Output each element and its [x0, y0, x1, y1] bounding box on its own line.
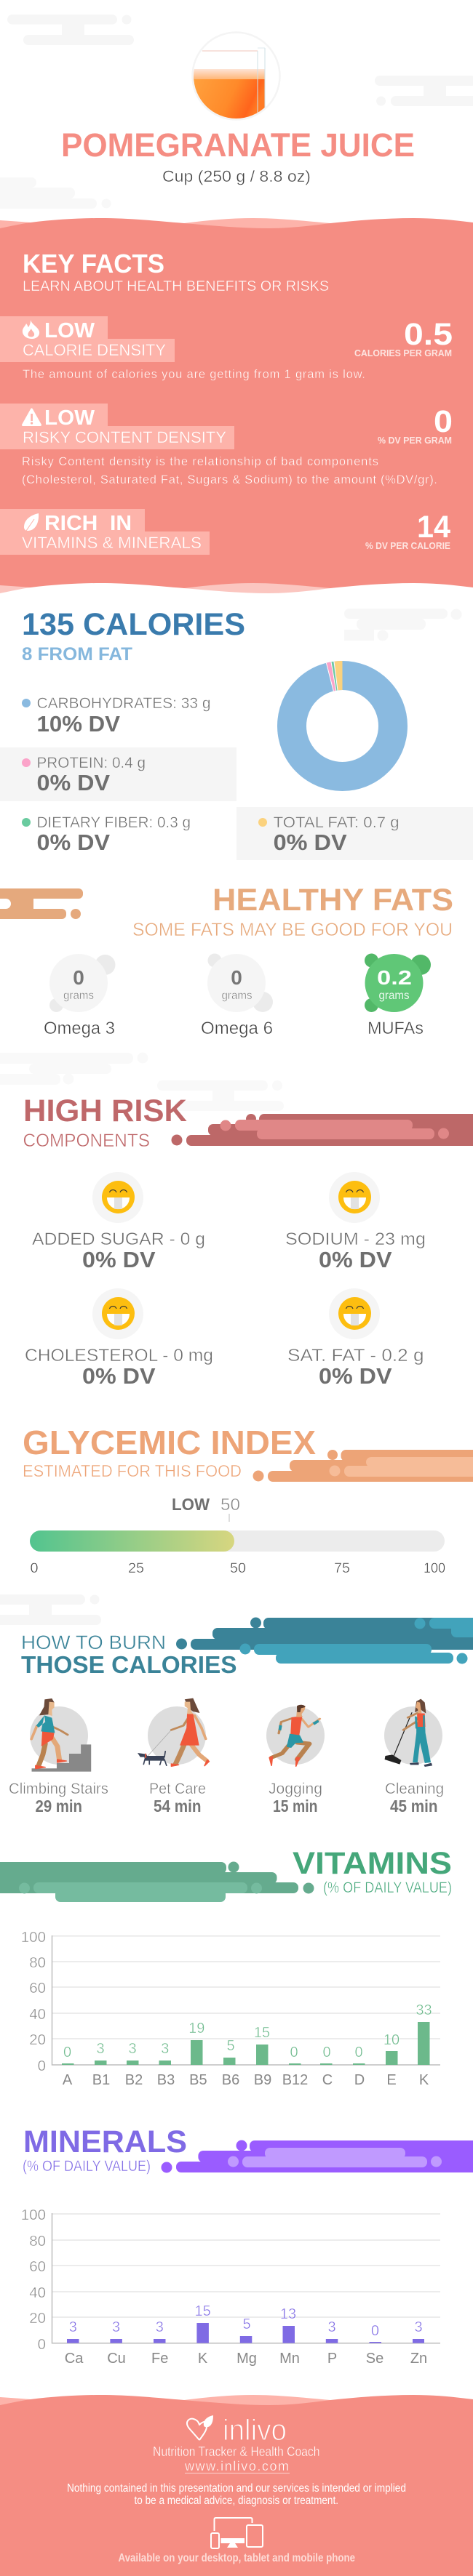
icon: leaf	[24, 513, 39, 531]
gauge scale	[31, 1561, 445, 1576]
bar chart: vitamins: 20	[29, 2031, 46, 2048]
bar chart: vitamins: 100	[21, 1929, 46, 1946]
heading: glycemic index: GLYCEMIC INDEX	[23, 1424, 316, 1461]
disclaimer	[67, 2482, 406, 2507]
gauge scale: 100	[424, 1561, 445, 1576]
legend: dietary fiber	[22, 814, 191, 855]
activity: climbing stairs	[9, 1698, 108, 1815]
fact: risky content density: 0	[434, 404, 453, 439]
heading: minerals: MINERALS	[23, 2124, 187, 2159]
panel: how to burn those calories	[9, 1617, 473, 1815]
bar chart: vitamins: C	[322, 2072, 333, 2088]
chart: macronutrient donut	[292, 661, 393, 777]
stat: omega 6	[201, 954, 273, 1038]
activity: cleaning	[384, 1699, 444, 1815]
activity: jogging: Jogging	[269, 1781, 322, 1797]
gauge scale: 75	[334, 1561, 350, 1576]
subheading: glycemic index: ESTIMATED FOR THIS FOOD	[23, 1461, 242, 1480]
bar chart: minerals: 40	[29, 2284, 46, 2301]
bar chart: vitamins: A	[63, 2072, 73, 2088]
heading: key facts: KEY FACTS	[23, 249, 164, 278]
bar chart: minerals: 20	[29, 2310, 46, 2327]
subheading: key facts: LEARN ABOUT HEALTH BENEFITS OR RISKS	[23, 278, 329, 294]
legend: total fat: TOTAL FAT: 0.7 g	[274, 814, 400, 831]
bar chart: vitamins: 0	[354, 2045, 363, 2061]
activity: jogging	[266, 1705, 325, 1815]
heading: vitamins: VITAMINS	[293, 1846, 452, 1881]
heading: high risk: HIGH RISK	[23, 1094, 187, 1128]
icon: grinning face	[102, 1297, 135, 1330]
legend: dietary fiber: DIETARY FIBER: 0.3 g	[36, 814, 191, 831]
stat: omega 3: grams	[63, 990, 94, 1002]
item: sodium	[285, 1172, 426, 1272]
title: POMEGRANATE JUICE	[61, 127, 415, 164]
bar chart: minerals: 0	[38, 2336, 46, 2353]
activity: climbing stairs: 29 min	[35, 1797, 82, 1815]
subheading: vitamins: (% OF DAILY VALUE)	[323, 1879, 452, 1896]
bar chart: vitamins: 3	[96, 2041, 105, 2057]
fact: calorie density: CALORIES PER GRAM	[354, 348, 452, 358]
bar chart: vitamins: 33	[416, 2002, 432, 2018]
icon: grinning face	[102, 1181, 135, 1213]
bar chart: vitamins: 5	[226, 2038, 235, 2054]
stat: omega 3	[44, 954, 115, 1038]
bar chart: vitamins: B5	[189, 2072, 207, 2088]
icon: warning triangle	[23, 409, 41, 425]
disclaimer: to be a medical advice, diagnosis or treatment.	[134, 2495, 338, 2507]
bar chart: vitamins: B2	[125, 2072, 143, 2088]
bar chart: vitamins: B6	[222, 2072, 239, 2088]
bar chart: vitamins: B3	[157, 2072, 175, 2088]
disclaimer: Nothing contained in this presentation and our services is intended or implied	[67, 2482, 406, 2495]
availability note: Available on your desktop, tablet and mobile phone	[118, 2552, 355, 2564]
item: saturated fat: SAT. FAT - 0.2 g	[287, 1346, 424, 1365]
subheading: minerals: (% OF DAILY VALUE)	[23, 2158, 151, 2175]
bar chart: vitamins: B12	[282, 2072, 308, 2088]
bar chart: vitamins: B9	[254, 2072, 271, 2088]
fact: vitamins and minerals: 14	[417, 510, 450, 545]
legend: total fat: 0% DV	[274, 830, 347, 855]
stat: omega 3: Omega 3	[44, 1019, 115, 1038]
bar chart: minerals: Cu	[107, 2351, 126, 2367]
bar chart: vitamins: 3	[161, 2041, 169, 2057]
bar chart: vitamins: B1	[92, 2072, 110, 2088]
bar chart: vitamins: K	[419, 2072, 429, 2088]
activity: pet care: 54 min	[154, 1797, 201, 1815]
panel: high risk components	[23, 1094, 473, 1389]
stat: MUFAs: 0.2	[377, 966, 412, 989]
legend: dietary fiber: 0% DV	[36, 830, 110, 855]
gauge value label: LOW	[172, 1495, 210, 1514]
gauge value label	[172, 1495, 240, 1514]
bar chart: minerals: 3	[69, 2319, 77, 2335]
icon: woman sweeping	[385, 1699, 432, 1767]
item: cholesterol	[25, 1288, 213, 1389]
bar chart: minerals: 3	[112, 2319, 120, 2335]
activity: cleaning: Cleaning	[385, 1781, 444, 1797]
food photo: glass of juice	[192, 32, 279, 121]
icon: grinning face	[338, 1181, 371, 1213]
bar chart: minerals: Ca	[65, 2351, 84, 2367]
heading: calories: 135 CALORIES	[22, 607, 245, 642]
item: saturated fat	[287, 1288, 424, 1389]
bar chart: vitamins: 0	[38, 2058, 46, 2074]
panel: minerals	[21, 2124, 473, 2367]
stat: omega 3: 0	[73, 966, 84, 989]
stat: omega 6: Omega 6	[201, 1019, 273, 1038]
subheading: components: COMPONENTS	[23, 1131, 150, 1151]
item: saturated fat: 0% DV	[319, 1363, 392, 1389]
bar chart: vitamins: 3	[128, 2041, 137, 2057]
panel: footer	[0, 2395, 473, 2576]
heading line 1: HOW TO BURN	[21, 1632, 166, 1653]
activity: climbing stairs: Climbing Stairs	[9, 1781, 108, 1797]
item: cholesterol: 0% DV	[82, 1363, 156, 1389]
bar chart: minerals: 80	[29, 2233, 46, 2250]
bar chart: minerals: 3	[414, 2319, 423, 2335]
logo: inlivo: inlivo	[223, 2413, 287, 2447]
gauge scale: 0	[31, 1561, 38, 1576]
fact: risky content density: Risky Content density is the relationship of bad components	[22, 455, 378, 468]
stat: omega 6: grams	[221, 990, 252, 1002]
item: added sugar	[32, 1172, 205, 1272]
item: sodium: 0% DV	[319, 1247, 392, 1272]
icon: devices	[211, 2518, 263, 2548]
item: added sugar: ADDED SUGAR - 0 g	[32, 1229, 205, 1249]
bar chart: minerals: Fe	[151, 2351, 168, 2367]
bar chart: vitamins: 15	[254, 2025, 270, 2041]
bar chart: vitamins: 0	[290, 2045, 298, 2061]
icon: flame	[23, 320, 39, 339]
bar chart: minerals: 13	[280, 2306, 296, 2322]
bar chart: vitamins: E	[386, 2072, 397, 2088]
stat: MUFAs: grams	[378, 990, 409, 1002]
item: sodium: SODIUM - 23 mg	[285, 1229, 426, 1249]
legend: carbohydrates	[22, 695, 211, 737]
bar chart: minerals: 3	[327, 2319, 336, 2335]
bar chart: vitamins	[21, 1929, 440, 2088]
fact: vitamins and minerals: % DV PER CALORIE	[365, 540, 450, 551]
heading: healthy fats: HEALTHY FATS	[212, 883, 453, 918]
bar chart: minerals: 15	[194, 2303, 211, 2319]
bar chart: minerals: Zn	[410, 2351, 427, 2367]
legend: carbohydrates: CARBOHYDRATES: 33 g	[36, 695, 211, 712]
bar chart: minerals: P	[327, 2351, 337, 2367]
legend: protein	[0, 747, 236, 801]
heading line 2: THOSE CALORIES	[21, 1651, 237, 1678]
item: cholesterol: CHOLESTEROL - 0 mg	[25, 1346, 213, 1365]
icon: woman climbing stairs	[31, 1698, 91, 1772]
fact: calorie density: CALORIE DENSITY	[23, 341, 166, 359]
fact: calorie density	[0, 316, 453, 381]
gauge value label: 50	[220, 1495, 240, 1514]
bar chart: vitamins: 60	[29, 1980, 46, 1997]
legend: total fat	[236, 807, 473, 860]
fact: risky content density: % DV PER GRAM	[378, 435, 452, 446]
bar chart: vitamins: 40	[29, 2006, 46, 2023]
fact: risky content density	[0, 404, 453, 486]
bar chart: vitamins: D	[354, 2072, 365, 2088]
gauge scale: 50	[230, 1561, 246, 1576]
fact: vitamins and minerals: RICH IN	[44, 512, 132, 535]
bar chart: minerals: 60	[29, 2258, 46, 2275]
bar chart: minerals: K	[198, 2351, 208, 2367]
item: added sugar: 0% DV	[82, 1247, 156, 1272]
gauge scale: 25	[128, 1561, 144, 1576]
legend: carbohydrates: 10% DV	[36, 711, 120, 737]
bar chart: vitamins: 10	[383, 2032, 400, 2048]
bar chart: vitamins: 19	[188, 2021, 204, 2037]
activity: cleaning: 45 min	[390, 1797, 438, 1815]
activity: jogging: 15 min	[273, 1797, 317, 1815]
bar chart: vitamins: 0	[63, 2045, 71, 2061]
serving size: Cup (250 g / 8.8 oz)	[162, 167, 311, 185]
activity: pet care	[138, 1698, 209, 1815]
bar chart: minerals: 100	[21, 2207, 46, 2223]
bar chart: minerals: 3	[156, 2319, 164, 2335]
fact: risky content density: RISKY CONTENT DENSITY	[23, 428, 226, 446]
stat: MUFAs	[365, 954, 431, 1038]
fact: calorie density: The amount of calories you are getting from 1 gram is low.	[23, 368, 365, 381]
icon: woman walking dog	[138, 1698, 209, 1766]
stat: MUFAs: MUFAs	[367, 1019, 424, 1038]
logo: inlivo	[187, 2413, 287, 2447]
bar chart: minerals: Mg	[236, 2351, 257, 2367]
fact: calorie density: 0.5	[404, 317, 453, 352]
bar chart: minerals: Se	[366, 2351, 383, 2367]
panel: glycemic index	[23, 1424, 473, 1576]
bar chart: vitamins: 80	[29, 1954, 46, 1971]
fact: vitamins and minerals	[0, 509, 450, 555]
subheading: healthy fats: SOME FATS MAY BE GOOD FOR YOU	[132, 920, 453, 940]
panel: key facts	[0, 218, 473, 612]
fact: vitamins and minerals: VITAMINS & MINERALS	[22, 534, 202, 552]
subheading: calories from fat: 8 FROM FAT	[22, 644, 132, 665]
bar chart: minerals: 5	[242, 2316, 251, 2332]
fact: risky content density: LOW	[44, 406, 95, 430]
legend: protein: 0% DV	[36, 770, 110, 795]
tagline: Nutrition Tracker & Health Coach	[153, 2444, 320, 2459]
panel: vitamins	[0, 1846, 452, 2088]
activity: pet care: Pet Care	[149, 1781, 206, 1797]
legend: protein: PROTEIN: 0.4 g	[36, 755, 146, 771]
bar chart: minerals: 0	[371, 2323, 379, 2339]
panel: healthy fats	[0, 883, 453, 1038]
gauge bar	[30, 1530, 445, 1552]
icon: grinning face	[338, 1297, 371, 1330]
bar chart: minerals	[21, 2207, 440, 2367]
bar chart: minerals: Mn	[279, 2351, 300, 2367]
website link: www.inlivo.com	[184, 2459, 289, 2473]
fact: risky content density: (Cholesterol, Saturated Fat, Sugars & Sodium) to the amount (%DV/gr).	[22, 473, 437, 486]
icon: jogger	[269, 1705, 319, 1766]
stat: omega 6: 0	[231, 966, 242, 989]
bar chart: vitamins: 0	[322, 2045, 331, 2061]
fact: calorie density: LOW	[44, 319, 95, 342]
